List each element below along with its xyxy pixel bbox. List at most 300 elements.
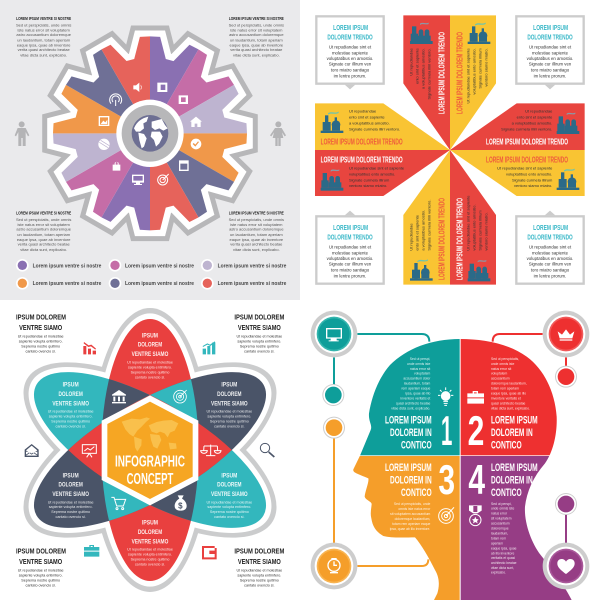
left yellow segment text: a voluptatibus amostio. xyxy=(349,121,390,126)
section 2 text: Sed ut perspiciatis, xyxy=(491,357,519,361)
text block: top left: LOREM IPSUM VENTRE SI NOSTRE xyxy=(16,16,72,22)
callout: bottom right xyxy=(516,211,584,284)
top yellow segment text: ventoro siamo miatro. xyxy=(483,48,488,87)
legend: Lorem ipsum ventre si nostre xyxy=(33,281,101,287)
corner text: top left: sapiente volupta entimfero. xyxy=(19,339,63,343)
callout: bottom right: Signate cur illirum ven xyxy=(529,262,572,267)
corner text: bottom left xyxy=(16,546,66,587)
legend: Lorem ipsum ventre si nostre xyxy=(125,281,194,287)
corner text: bottom left: Ut repudiandae et molestiae xyxy=(18,568,64,572)
petal text: upper left: VENTRE SIAMO xyxy=(52,400,89,407)
flower outline xyxy=(0,308,303,592)
top red segment text: a voluptatibus amostio. xyxy=(421,48,426,89)
icon: picture xyxy=(99,116,109,126)
section 3 text: 3 xyxy=(438,456,455,503)
petal text: upper right: Seprema nostre quitimo xyxy=(210,420,249,424)
text block: top left: astro accusantium doloremque xyxy=(16,32,72,37)
gear outline xyxy=(54,37,246,230)
legend: Lorem ipsum ventre si nostre xyxy=(33,263,101,269)
icon: bank xyxy=(112,390,126,403)
section 1 text: laudantium, totam xyxy=(404,382,431,386)
small node: teal xyxy=(322,384,344,406)
flower petals xyxy=(34,319,266,581)
bottom red segment text: LOREM IPSUM DOLOREM TRENDO xyxy=(454,198,464,280)
petal text: lower right: cantato ovencio si. xyxy=(214,515,244,519)
section 4 text: DOLOREM IN xyxy=(491,475,533,487)
section 2 text: unde omnis iste xyxy=(491,362,514,366)
right red segment text: a voluptatibus amostio. xyxy=(512,121,552,126)
icon: wallet xyxy=(157,83,167,92)
small node: purple xyxy=(555,493,577,515)
section 4 text: explicabo. xyxy=(491,571,506,575)
section 4 text: sit voluptatem xyxy=(491,517,512,521)
section 2 text: voluptatem xyxy=(491,372,508,376)
petal text: lower left: DOLOREM xyxy=(58,482,83,489)
left yellow segment text xyxy=(321,109,403,146)
bottom red segment text: Signate curmela illirum xyxy=(478,210,483,251)
corner text: bottom right: cantato ovencio si. xyxy=(244,583,274,587)
petal text: upper right: IPSUM xyxy=(221,382,238,389)
callout: bottom right: im lentre prorum. xyxy=(534,273,566,278)
petal text: upper left: cantato ovencio si. xyxy=(56,425,86,429)
corner text: bottom right xyxy=(234,546,284,587)
legend: Lorem ipsum ventre si nostre xyxy=(218,281,286,287)
big node: clock xyxy=(311,543,357,589)
bottom yellow segment text: a voluptatibus amostio. xyxy=(421,210,426,251)
gear hub with globe xyxy=(116,100,184,167)
panel: flower concept infographic xyxy=(16,308,284,592)
icon: envelope xyxy=(25,444,39,457)
callout: bottom right: toro miatro santiago xyxy=(531,268,570,273)
petal text: top: IPSUM xyxy=(142,332,158,339)
callout: top left: toro miatro santiago xyxy=(331,68,370,73)
petal text: lower right: Ut repudiandae et molestiae xyxy=(206,500,252,504)
text block: bottom right: Sed ut perspiciatis, unde omnis xyxy=(229,217,284,222)
petal text: lower left: IPSUM xyxy=(63,472,79,479)
corner text: top right: VENTRE SIAMO xyxy=(238,323,281,332)
icon: target xyxy=(174,390,187,403)
callout: bottom left: DOLOREM TRENDO xyxy=(327,232,373,241)
left red segment text xyxy=(321,155,405,188)
icon: rising chart xyxy=(203,341,215,354)
section 4 text: Sed ut perspi, xyxy=(491,502,512,506)
section 1 text: Sed ut perspi, xyxy=(410,357,430,361)
text block: top right: Sed ut perspiciatis, unde omnis xyxy=(229,22,284,27)
left yellow segment text: LOREM IPSUM DOLOREM TRENDO xyxy=(321,136,403,146)
text block: bottom left: eaque ipsa, quae ab inventore xyxy=(17,237,71,242)
petal text: top xyxy=(127,332,173,379)
text block: top right: eaque ipsa, quae ab inventore xyxy=(230,42,284,47)
petal text: lower right: IPSUM xyxy=(221,472,238,479)
corner text: bottom right: IPSUM DOLOREM xyxy=(234,546,284,555)
text block: top right: vitae dicta sunt, explicabo. xyxy=(233,52,280,57)
callout: bottom left: toro miatro santiago xyxy=(331,268,370,273)
callout: bottom right: LOREM IPSUM xyxy=(533,223,568,232)
right red segment text: ento sint et sapiente xyxy=(517,115,553,120)
petal text: upper right: VENTRE SIAMO xyxy=(211,400,248,407)
section 2 text: accusantium xyxy=(491,377,510,381)
section 4 text: laudantium, xyxy=(491,532,508,536)
callout: bottom left: Signate cur illirum ven xyxy=(329,262,372,267)
section 1 text: LOREM IPSUM xyxy=(385,414,432,426)
callout: top left: LOREM IPSUM xyxy=(333,23,368,32)
bottom yellow segment text: ento sint et sapiente xyxy=(415,214,420,251)
hexagon title xyxy=(115,454,185,488)
section 3 text: doloremque laudantium, xyxy=(395,517,430,521)
text block: bottom left xyxy=(16,211,72,252)
section 4 text: veritatis et quasi xyxy=(491,556,515,560)
petal text: upper left: Seprema nostre quitimo xyxy=(51,420,90,424)
bottom yellow segment text: Signate curmela illiri ventoro. xyxy=(427,200,432,251)
icon: female person xyxy=(270,121,286,146)
section 2 text: quasi architecto beatae xyxy=(491,401,526,405)
petal text: lower right: DOLOREM xyxy=(217,482,242,489)
section 2 text: CONTICO xyxy=(491,439,522,451)
petal text: upper right: sapiente volupta entimfero. xyxy=(207,415,251,419)
panel: head infographic: 1 xyxy=(441,407,452,454)
icon: magnifier xyxy=(260,443,274,457)
callout: bottom left: LOREM IPSUM xyxy=(333,223,368,232)
left red segment text: voluptatibus ento amostio. xyxy=(349,171,395,176)
big node: crown xyxy=(543,311,589,357)
right yellow segment text: Ut repudiandae sint et sapiente xyxy=(497,166,553,171)
text block: bottom left: Sed ut perspiciatis, unde omnis xyxy=(16,217,71,222)
callout: top right: molestiae sapiente xyxy=(532,50,569,55)
text block: bottom right: iste natus error sit voluptatem xyxy=(230,222,283,227)
section 4 text: accusantium xyxy=(491,522,510,526)
legend: Lorem ipsum ventre si nostre xyxy=(218,263,286,269)
bottom yellow segment text: LOREM IPSUM DOLOREM TRENDO xyxy=(437,198,447,280)
callout: top right: Ut repudiandae sint et xyxy=(529,45,572,50)
callout: top left: Ut repudiandae sint et xyxy=(329,45,372,50)
section 1 text: natus error sit xyxy=(410,367,430,371)
top yellow segment text: voluptatibus ento amostio. xyxy=(472,48,477,95)
top red segment text: Ut repudiandae xyxy=(408,48,413,76)
section 1 text: inventore veritatis et xyxy=(401,397,430,401)
hexagon title: CONCEPT xyxy=(127,471,173,488)
section 4 text: eaque ipsa, quae xyxy=(491,546,517,550)
right red segment text: Signate curmela illiri ventoro. xyxy=(501,126,552,131)
right red segment text xyxy=(486,109,568,146)
callout: top right: voluptatibus en amostio. xyxy=(527,56,573,61)
petal text: upper right: cantato ovencio si. xyxy=(214,425,244,429)
right yellow segment text: voluptatibus ento amostio. xyxy=(506,171,552,176)
corner text: top right: cantato ovencio si. xyxy=(244,349,274,353)
petal text: bottom: DOLOREM xyxy=(138,529,162,536)
corner text: top right xyxy=(234,312,284,353)
text block: top left xyxy=(16,16,72,57)
callout: top right: Signate cur illirum ven xyxy=(529,62,572,67)
callout: bottom left: molestiae sapiente xyxy=(332,250,369,255)
icon: shopping cart xyxy=(111,497,126,510)
big node: monitor xyxy=(311,311,357,357)
left yellow segment text: Ut repudiandae xyxy=(349,109,377,114)
corner text: top right: Seprema nostre quitimo xyxy=(240,344,279,348)
text block: bottom right: un laudantium, totam aperiam xyxy=(230,232,283,237)
text block: bottom right: verita quasi architecto beatae xyxy=(230,242,283,247)
icon: chip xyxy=(179,95,188,104)
connector lines xyxy=(334,334,566,566)
icon: money bag: $ xyxy=(178,501,183,510)
section 4 text: LOREM IPSUM xyxy=(491,462,538,474)
section 4 text: aperiam xyxy=(491,541,503,545)
icon: light bulb xyxy=(438,387,453,405)
petal text: top: sapiente volupta entimfero. xyxy=(128,365,172,369)
central hexagon xyxy=(102,395,198,505)
top yellow segment text xyxy=(454,32,488,114)
icon: speaker xyxy=(133,83,142,92)
callout: bottom right: Ut repudiandae sint et xyxy=(529,245,572,250)
section 4 text: natus error xyxy=(491,512,508,516)
pinwheel segments xyxy=(315,15,585,285)
corner text: top left: VENTRE SIAMO xyxy=(19,323,62,332)
section 3 text: omnis iste natus error xyxy=(398,507,431,511)
corner text: top right: sapiente volupta entimfero. xyxy=(237,339,281,343)
corner text: bottom right: sapiente volupta entimfero. xyxy=(237,573,281,577)
icon: target xyxy=(158,174,169,185)
top red segment text: Signate curmela illiri ventoro. xyxy=(427,48,432,99)
section 2 text: eaque ipsa, quae ab illo xyxy=(491,392,526,396)
callout: bottom right: voluptatibus en amostio. xyxy=(527,256,573,261)
petal text: lower left: sapiente volupta entimfero. xyxy=(49,505,93,509)
petal text: bottom: VENTRE SIAMO xyxy=(132,538,168,545)
petal text: lower left: Ut repudiandae et molestiae xyxy=(48,500,94,504)
left red segment text: LOREM IPSUM DOLOREM TRENDO xyxy=(321,155,403,165)
petal text: lower left: Seprema nostre quitimo xyxy=(51,510,90,514)
section 2 text: LOREM IPSUM xyxy=(491,414,538,426)
section 1 text: accusantium dolor xyxy=(403,377,431,381)
bottom yellow segment text: Ut repudiandae xyxy=(408,223,413,251)
callout: top left: voluptatibus en amostio. xyxy=(327,56,373,61)
section 1 text: DOLOREM IN xyxy=(390,427,432,439)
icon: signal xyxy=(110,94,122,106)
section 3 text: ipsa, quae ab illo inventore. xyxy=(390,527,430,531)
left red segment text: ventoro siamo miatro. xyxy=(349,183,387,188)
corner text: bottom left: cantato ovencio si. xyxy=(26,583,56,587)
text block: top left: iste natus error sit voluptatem xyxy=(18,27,70,32)
callout: bottom left: im lentre prorum. xyxy=(334,273,366,278)
petal text: upper left: sapiente volupta entimfero. xyxy=(49,415,93,419)
bottom yellow segment text xyxy=(408,198,447,280)
icon: briefcase xyxy=(467,391,484,404)
callout: top right: DOLOREM TRENDO xyxy=(527,32,573,41)
icon: lock xyxy=(113,162,120,171)
small node: red xyxy=(555,366,577,388)
petal text: upper left xyxy=(48,382,94,429)
callout: top left xyxy=(316,16,384,89)
icon: scales xyxy=(201,445,221,456)
callout: top right: im lentre prorum. xyxy=(534,73,566,78)
section 3 text: DOLOREM IN xyxy=(390,475,432,487)
callout: bottom left xyxy=(316,211,384,284)
section 4 text: 4 xyxy=(468,456,485,503)
section 3 text: Sed ut perspiciatis, unde xyxy=(394,502,430,506)
text block: top right: verita quasi architecto beatae xyxy=(230,47,283,52)
bottom red segment text: ventoro siamo miatro. xyxy=(483,212,488,251)
corner text: bottom left: sapiente volupta entimfero. xyxy=(19,573,63,577)
text block: top right xyxy=(229,16,284,57)
corner text: bottom left: VENTRE SIAMO xyxy=(19,557,62,566)
section 1 text: CONTICO xyxy=(401,439,432,451)
text block: top left: Sed ut perspiciatis, unde omnis xyxy=(16,22,71,27)
gear icons xyxy=(98,83,202,185)
section 2 text: totam rem aperiam xyxy=(491,387,519,391)
section 4 text: doloremque xyxy=(491,527,509,531)
section 3 text: totam rem aperiam eaque xyxy=(392,522,430,526)
section 4 text: ab illo inventore xyxy=(491,551,514,555)
corner text: bottom right: VENTRE SIAMO xyxy=(238,557,281,566)
panel: factory pinwheel infographic xyxy=(315,15,585,285)
top red segment text: ento sint et sapiente xyxy=(415,48,420,84)
icon: ball xyxy=(98,139,110,150)
gear colour segments xyxy=(42,25,258,242)
panel: head infographic xyxy=(311,311,594,600)
section 4 text xyxy=(468,456,538,575)
section 4 text: CONTICO xyxy=(491,487,522,499)
petal text: bottom: Seprema nostre quitimo xyxy=(131,558,169,562)
petal text: lower left xyxy=(48,472,94,519)
section 4 text: architecto beatae xyxy=(491,561,517,565)
section 4 text: unde omnis iste xyxy=(491,507,514,511)
corner text: bottom left: IPSUM DOLOREM xyxy=(16,546,66,555)
callout: top left: molestiae sapiente xyxy=(332,50,369,55)
callout: top right: LOREM IPSUM xyxy=(533,23,568,32)
section 2 text: inventore veritatis et xyxy=(491,397,521,401)
section 4 text: totam rem xyxy=(491,536,506,540)
top yellow segment text: Ut repudiandae sint et sapiente xyxy=(466,48,471,103)
petal text: lower right: sapiente volupta entimfero. xyxy=(207,505,251,509)
hexagon title: INFOGRAPHIC xyxy=(115,454,185,471)
icon: medal xyxy=(469,505,482,526)
callout: bottom right: molestiae sapiente xyxy=(532,250,569,255)
section 1 text xyxy=(385,357,452,454)
text block: bottom left: vitae dicta sunt, explicabo. xyxy=(20,247,67,252)
petal text: upper right xyxy=(206,382,252,429)
text block: bottom left: un laudantium, totam aperiam xyxy=(17,232,71,237)
right yellow segment text xyxy=(486,155,568,188)
text block: top right: iste natus error sit voluptatem xyxy=(230,27,283,32)
text block: top right: un laudantium, totam aperiam xyxy=(230,37,283,42)
factory icons xyxy=(321,23,579,281)
text block: bottom right: vitae dicta sunt, explicabo. xyxy=(233,247,280,252)
text block: bottom right: astro accusantium doloremque xyxy=(229,227,284,232)
petal text: upper right: DOLOREM xyxy=(217,391,242,398)
petal text: lower right xyxy=(206,472,252,519)
corner text: top left: IPSUM DOLOREM xyxy=(16,312,66,321)
petal text: upper left: Ut repudiandae et molestiae xyxy=(48,410,94,414)
section 2 text: doloremque laudantium, xyxy=(491,382,527,386)
callout: top left: DOLOREM TRENDO xyxy=(327,32,373,41)
right red segment text: Ut repudiandae xyxy=(525,109,553,114)
petal text: lower left: VENTRE SIAMO xyxy=(52,491,89,498)
petal text: bottom: IPSUM xyxy=(142,520,158,527)
big node: heart xyxy=(543,543,589,589)
top yellow segment text: Signate curmela illirum xyxy=(478,48,483,89)
callout: bottom right: DOLOREM TRENDO xyxy=(527,232,573,241)
right yellow segment text: ventoro siamo miatro. xyxy=(514,183,552,188)
petal text: lower right: VENTRE SIAMO xyxy=(211,491,248,498)
petal text: lower right: Seprema nostre quitimo xyxy=(210,510,249,514)
text block: top right: astro accusantium doloremque xyxy=(229,32,284,37)
text block: bottom right xyxy=(229,211,284,252)
panel: gear infographic xyxy=(0,0,300,300)
head silhouette quadrants xyxy=(353,339,572,600)
section 2 text: vitae dicta sunt, explicabo. xyxy=(491,406,530,410)
section 1 text: rem aperiam eaque xyxy=(401,387,430,391)
text block: top left: vitae dicta sunt, explicabo. xyxy=(20,52,67,57)
section 2 text: DOLOREM IN xyxy=(491,427,533,439)
right yellow segment text: Signate curmela illirum xyxy=(512,177,553,182)
section 2 text: natus error sit xyxy=(491,367,511,371)
petal text: upper right: Ut repudiandae et molestiae xyxy=(206,410,252,414)
left yellow segment text: ento sint et sapiente xyxy=(349,115,385,120)
text block: bottom left: verita quasi architecto beatae xyxy=(18,242,70,247)
text block: top right: LOREM IPSUM VENTRE SI NOSTRE xyxy=(229,16,284,22)
icon: presentation xyxy=(82,445,96,457)
petal text: top: Seprema nostre quitimo xyxy=(131,370,169,374)
text block: bottom left: astro accusantium doloremque xyxy=(16,227,72,232)
section 1 text: quasi architecto beatae xyxy=(396,401,430,405)
petal text: top: Ut repudiandae et molestiae xyxy=(127,361,173,365)
icon: badge xyxy=(191,139,201,149)
corner text: top left: Seprema nostre quitimo xyxy=(21,344,60,348)
text block: top left: eaque ipsa, quae ab inventore xyxy=(17,42,71,47)
left red segment text: Signate curmela illirum xyxy=(349,177,390,182)
icon: house xyxy=(190,117,202,127)
icon: male person xyxy=(15,121,29,146)
legend: Lorem ipsum ventre si nostre xyxy=(125,263,194,269)
section 3 text: LOREM IPSUM xyxy=(385,462,432,474)
icon: falling chart xyxy=(83,342,96,354)
callout: bottom left: Ut repudiandae sint et xyxy=(329,245,372,250)
section 1 text: voluptatem xyxy=(414,372,431,376)
callout: top left: im lentre prorum. xyxy=(334,73,366,78)
icon: wallet xyxy=(202,546,217,559)
section 3 text: sit voluptatem accusantium xyxy=(390,512,431,516)
section 1 text: vitae dicta sunt, explicabo. xyxy=(391,406,430,410)
section 2 text: 2 xyxy=(468,407,484,454)
bottom red segment text xyxy=(454,195,488,280)
petal text: bottom: cantato ovencio si. xyxy=(135,563,165,567)
text block: bottom left: LOREM IPSUM VENTRE SI NOSTRE xyxy=(16,211,72,217)
top red segment text xyxy=(408,32,447,114)
callout: top right: toro miatro santiago xyxy=(531,68,570,73)
section 4 text: vitae dicta sunt, xyxy=(491,566,514,570)
petal text: top: VENTRE SIAMO xyxy=(132,351,168,358)
corner text: bottom right: Seprema nostre quitimo xyxy=(240,578,279,582)
corner text: top right: IPSUM DOLOREM xyxy=(234,312,284,321)
left yellow segment text: Signate curmela illiri ventoro. xyxy=(349,126,400,131)
petal text: top: DOLOREM xyxy=(138,342,162,349)
text block: bottom left: iste natus error sit voluptatem xyxy=(18,222,70,227)
petal text: bottom xyxy=(127,520,173,567)
callout: top left: Signate cur illirum ven xyxy=(329,62,372,67)
petal text: upper left: IPSUM xyxy=(63,382,79,389)
corner text: bottom left: Seprema nostre quitimo xyxy=(21,578,60,582)
world map xyxy=(122,417,178,452)
text block: top left: un laudantium, totam aperiam xyxy=(17,37,71,42)
section 3 text xyxy=(385,456,455,531)
legend xyxy=(16,259,286,290)
petal text: bottom: Ut repudiandae et molestiae xyxy=(127,548,173,552)
corner text: top left: Ut repudiandae et molestiae xyxy=(18,334,64,338)
text block: bottom right: eaque ipsa, quae ab inventore xyxy=(230,237,284,242)
text block: bottom right: LOREM IPSUM VENTRE SI NOSTRE xyxy=(229,211,284,217)
section 3 text: CONTICO xyxy=(401,487,432,499)
callout: top right xyxy=(516,16,584,89)
corner text: top right: Ut repudiandae et molestiae xyxy=(236,334,282,338)
petal text: upper left: DOLOREM xyxy=(58,391,83,398)
